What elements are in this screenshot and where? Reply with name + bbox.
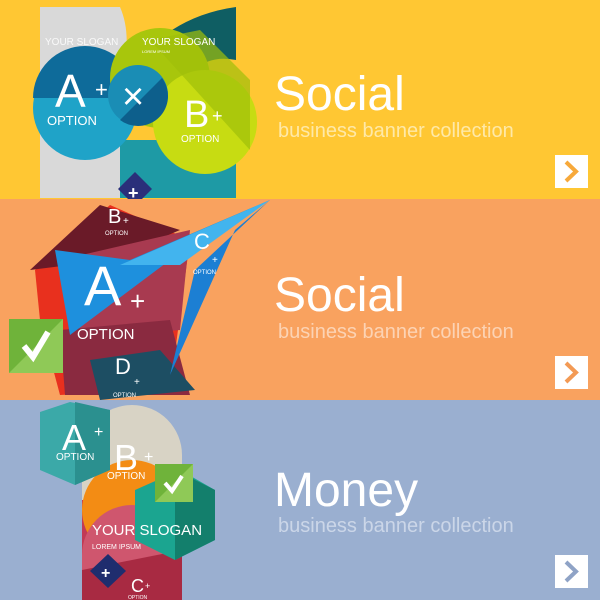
art: triangles: OPTION (113, 393, 136, 399)
art: circles: + (212, 106, 223, 126)
art: hexagons: OPTION (107, 471, 145, 482)
art: triangles: OPTION (77, 326, 135, 343)
art: hexagons: A (62, 417, 86, 458)
panel: orange banner (0, 199, 600, 400)
subtitle: business banner collection (278, 321, 514, 343)
art: hexagons: B (114, 437, 138, 478)
art: circles: OPTION (47, 113, 97, 128)
heading: Social: Social (274, 68, 405, 121)
icon: check (9, 319, 63, 373)
art: circles: A (55, 65, 86, 117)
art: triangles: B (108, 206, 121, 228)
art: triangles: + (134, 377, 140, 388)
panel: blue-grey banner (0, 400, 600, 600)
button: arrow (555, 356, 588, 389)
art: circles: LOREM IPSUM (142, 49, 170, 54)
art: circles (33, 7, 257, 206)
art: triangles: + (130, 286, 145, 316)
art: circles: × (122, 76, 144, 118)
art: hexagons: + (101, 565, 110, 582)
art: hexagons: + (144, 449, 153, 466)
art: triangles: OPTION (193, 270, 216, 276)
art: triangles: A (84, 254, 122, 317)
art: triangles: OPTION (105, 231, 128, 237)
button: arrow (555, 155, 588, 188)
art: hexagons: OPTION (56, 452, 94, 463)
heading: Money: Money (274, 464, 418, 517)
heading: Social: Social (274, 269, 405, 322)
art: circles: YOUR SLOGAN (142, 37, 215, 48)
art: triangles: D (115, 354, 131, 379)
art: triangles (30, 200, 270, 400)
art: triangles: + (123, 216, 129, 227)
subtitle: business banner collection (278, 515, 514, 537)
subtitle: business banner collection (278, 120, 514, 142)
art: circles: + (128, 183, 139, 203)
art: circles: OPTION (181, 134, 219, 145)
art: hexagons: + (94, 424, 103, 441)
art: hexagons: C (131, 576, 144, 596)
art: triangles: C (194, 229, 210, 254)
art: hexagons (40, 402, 215, 600)
art: hexagons: + (145, 581, 150, 591)
button: arrow (555, 555, 588, 588)
art: circles: B (184, 94, 209, 136)
art: hexagons: YOUR SLOGAN (92, 522, 202, 539)
art: circles: + (95, 77, 108, 102)
panel: yellow banner (0, 0, 600, 206)
art: circles: YOUR SLOGAN (45, 37, 118, 48)
art: hexagons: LOREM IPSUM (92, 544, 141, 551)
art: triangles: + (212, 255, 218, 266)
